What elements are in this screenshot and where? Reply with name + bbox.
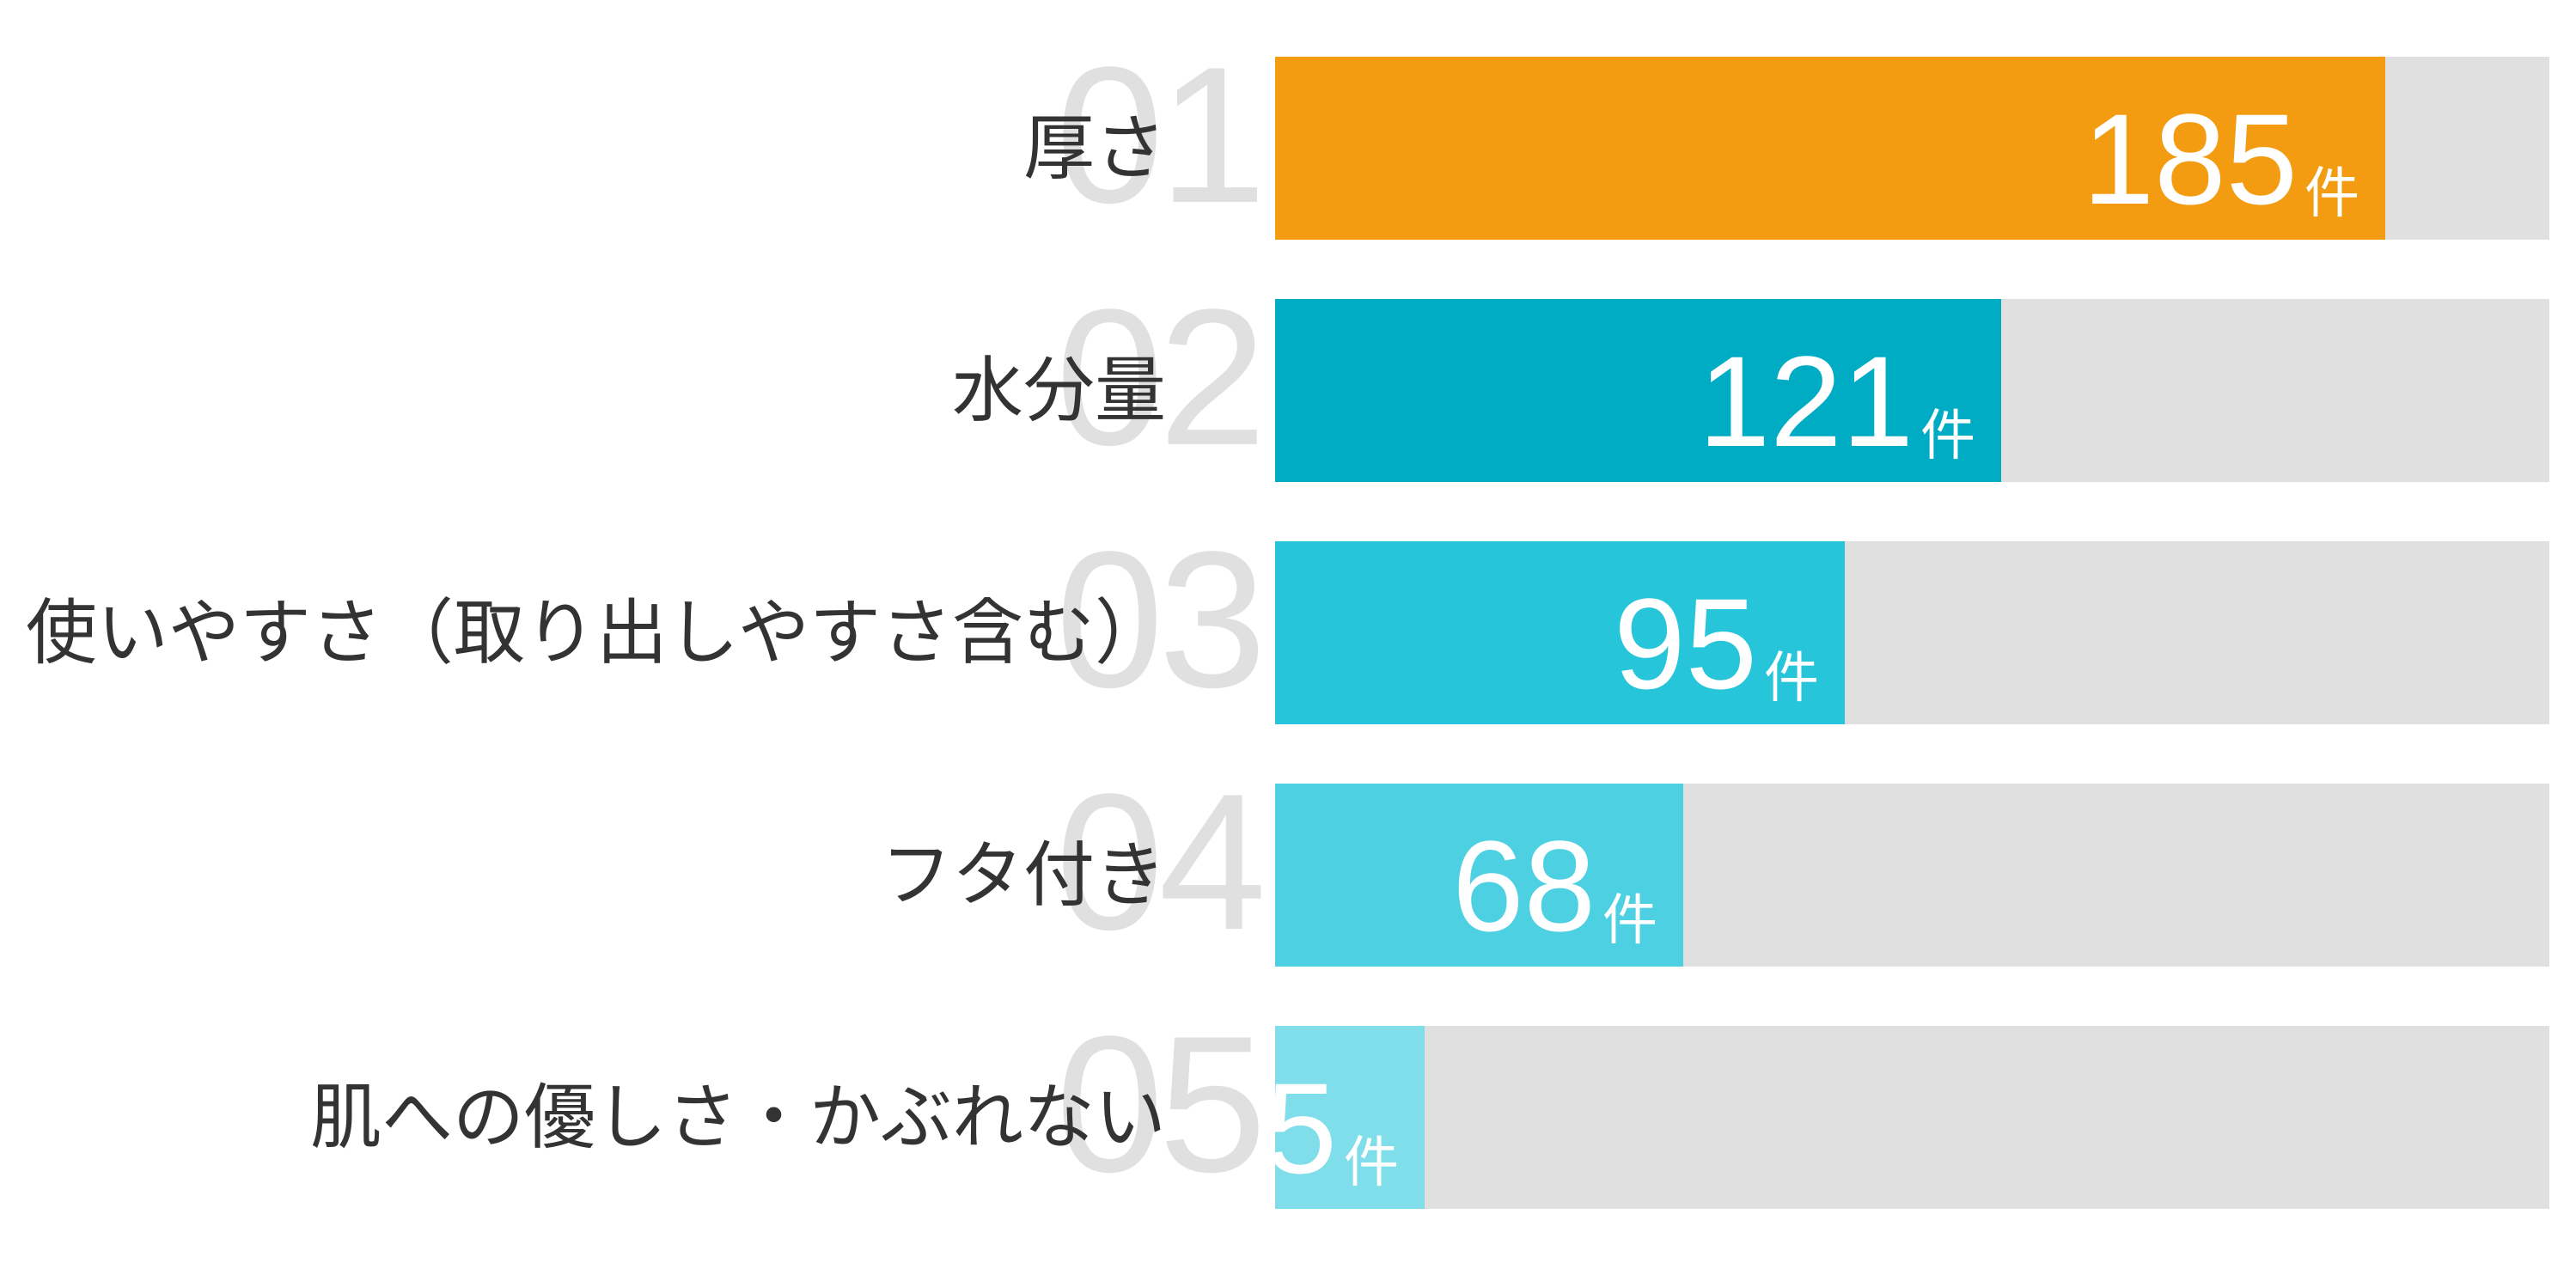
rank number 04: 04 (1056, 753, 1261, 970)
row 3 (26, 510, 2549, 728)
bar fill 68: 68件 (1452, 814, 1657, 958)
label: 肌への優しさ・かぶれない (310, 1077, 1166, 1157)
label: 使いやすさ（取り出しやすさ含む） (26, 593, 1166, 673)
bar fill 121 (1275, 299, 2001, 482)
label: 水分量 (952, 351, 1166, 430)
row 1: 厚さ (1023, 26, 2549, 243)
bar track (1275, 299, 2549, 482)
rank number 03: 03 (1056, 510, 1261, 728)
bar fill 121: 121件 (1699, 329, 1975, 473)
row 2: 水分量 (952, 268, 2549, 485)
bar fill 95 (1275, 541, 1845, 724)
rank number 05: 05 (1056, 995, 1261, 1212)
bar track (1275, 1026, 2549, 1209)
rank number 01: 01 (1056, 26, 1261, 243)
bar track (1275, 57, 2549, 240)
rank number 02: 02 (1056, 268, 1261, 485)
label: 厚さ (1023, 108, 1166, 188)
bar fill 68 (1275, 784, 1683, 967)
bar fill 25 (1275, 1026, 1425, 1209)
row 4 (881, 753, 2549, 970)
row 5 (310, 995, 2549, 1212)
bar fill 185 (1275, 57, 2385, 240)
label: フタ付き (881, 835, 1166, 915)
bar fill 185: 185件 (2083, 87, 2359, 231)
bar fill 95: 95件 (1614, 571, 1819, 716)
bar track (1275, 541, 2549, 724)
bar track (1275, 784, 2549, 967)
